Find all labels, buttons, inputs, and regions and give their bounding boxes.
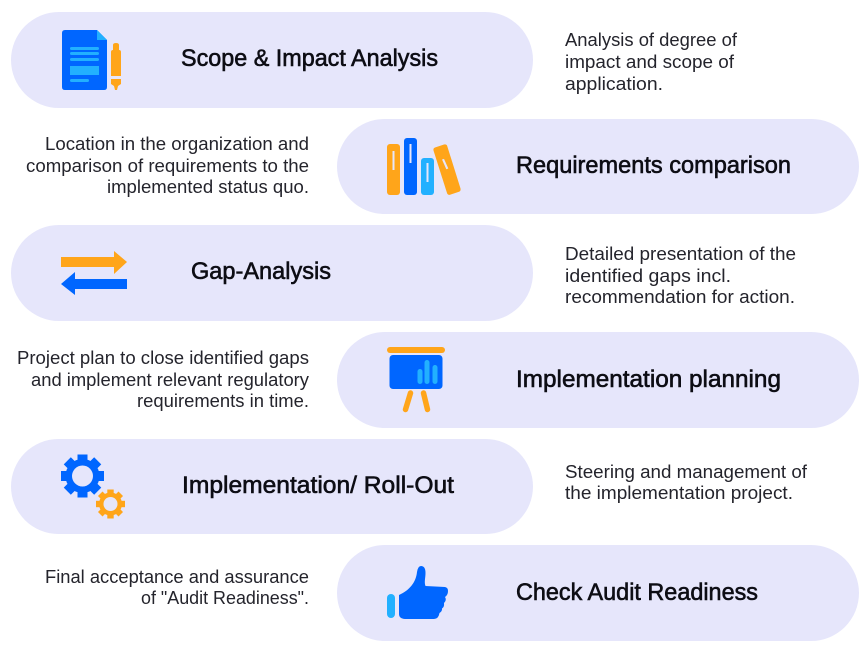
description 4 (17, 348, 309, 411)
icon: document and pen (62, 30, 121, 90)
heading: Requirements comparison: Requirements comparison (516, 152, 791, 179)
description 1: impact and scope of (565, 52, 735, 72)
description 1: application. (565, 74, 663, 94)
description 5: Steering and management of (565, 462, 808, 482)
pill background 6 (337, 545, 859, 641)
step 1: scope and impact analysis (11, 12, 738, 108)
description 6: Final acceptance and assurance (45, 567, 309, 587)
step 3: gap analysis (11, 225, 796, 321)
step 4: implementation planning (17, 332, 859, 428)
description 1 (565, 30, 738, 94)
description 3: Detailed presentation of the (565, 244, 796, 264)
pill background 5 (11, 439, 533, 534)
heading: Check Audit Readiness: Check Audit Readiness (516, 579, 758, 606)
pill background 2 (337, 119, 859, 214)
step 2: requirements comparison (26, 119, 859, 214)
pill background 1 (11, 12, 533, 108)
description 2: Location in the organization and (45, 134, 309, 154)
heading: Gap-Analysis: Gap-Analysis (191, 258, 331, 285)
description 2: comparison of requirements to the (26, 156, 309, 176)
heading: Implementation planning: Implementation planning (516, 366, 781, 393)
pill background 4 (337, 332, 859, 428)
icon: presentation board (387, 347, 445, 410)
description 6 (45, 567, 309, 608)
icon: books (387, 138, 461, 195)
description 2: implemented status quo. (107, 177, 309, 197)
description 4: Project plan to close identified gaps (17, 348, 309, 368)
pill background 3 (11, 225, 533, 321)
heading: Implementation/ Roll-Out: Implementation/ Roll-Out (182, 472, 454, 499)
icon: thumbs up (387, 566, 448, 619)
description 2 (26, 134, 309, 197)
icon: gears (61, 454, 125, 518)
icon: opposing arrows (61, 251, 127, 295)
description 3: recommendation for action. (565, 287, 795, 307)
step 5: implementation roll-out (11, 439, 808, 534)
description 3 (565, 244, 796, 307)
description 6: of "Audit Readiness". (141, 588, 309, 608)
description 1: Analysis of degree of (565, 30, 738, 50)
description 5: the implementation project. (565, 483, 793, 503)
step 6: check audit readiness (45, 545, 859, 641)
description 5 (565, 462, 808, 503)
description 4: and implement relevant regulatory (31, 370, 309, 390)
description 4: requirements in time. (137, 391, 309, 411)
description 3: identified gaps incl. (565, 266, 731, 286)
heading: Scope & Impact Analysis: Scope & Impact Analysis (181, 45, 438, 72)
